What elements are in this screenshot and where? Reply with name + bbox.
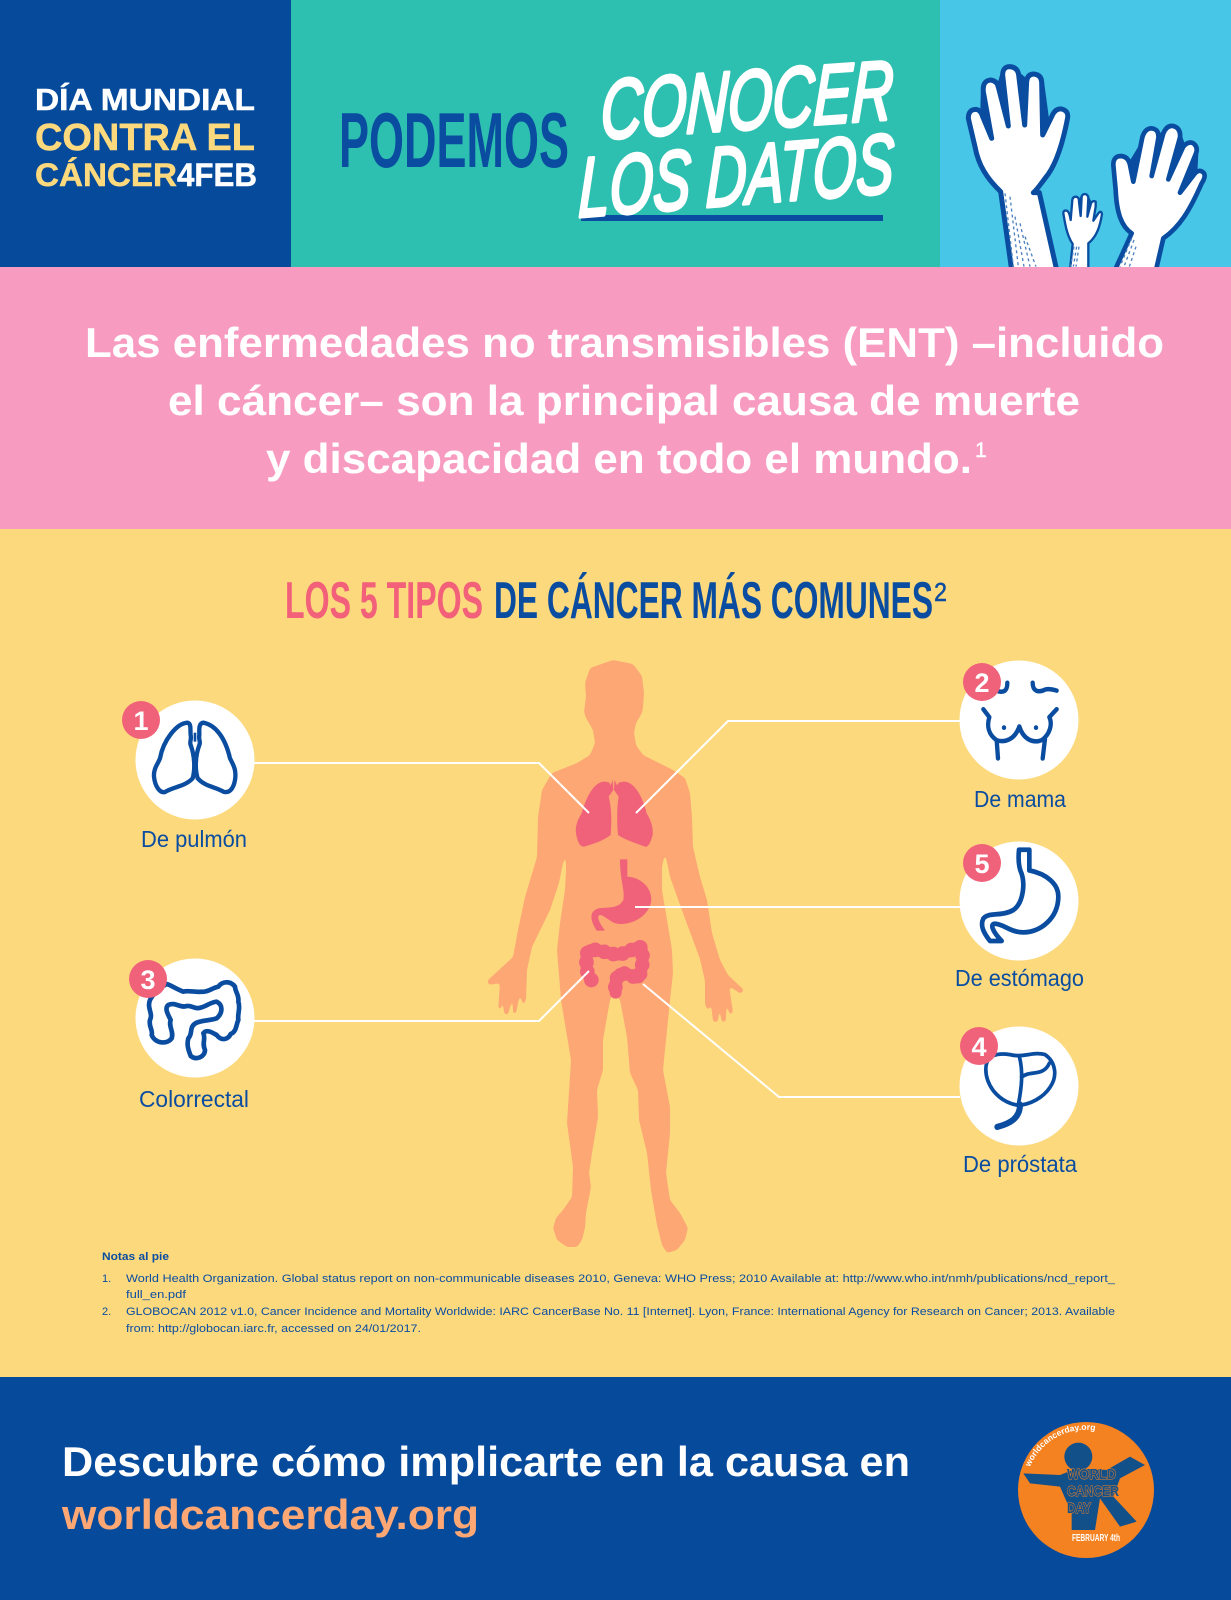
callout: prostate cancer <box>960 1026 1078 1177</box>
panel: campaign name <box>0 0 291 267</box>
panel: call to action: worldcancerday.org <box>61 1491 479 1538</box>
footnotes: Notas al pie <box>102 1251 169 1263</box>
callout: lung cancer <box>122 700 254 852</box>
icon: colon <box>149 982 239 1058</box>
footnotes: from: http://globocan.iarc.fr, accessed on 24/01/2017. <box>126 1323 421 1335</box>
footnotes: full_en.pdf <box>126 1289 187 1301</box>
World Cancer Day logo: DAY <box>1067 1500 1091 1517</box>
panel: key message: 1 <box>975 439 987 462</box>
number badge 4: 4 <box>971 1032 987 1062</box>
icon: stomach <box>982 850 1058 941</box>
organ: lungs <box>576 780 653 847</box>
callout: colorectal cancer: Colorrectal <box>139 1086 249 1112</box>
panel: slogan: PODEMOS <box>339 96 569 184</box>
number badge 1 <box>122 701 160 739</box>
number badge 4 <box>960 1027 998 1065</box>
icon: lungs <box>154 723 235 792</box>
arm hatching <box>1005 193 1136 267</box>
panel: slogan: LOS DATOS <box>578 116 895 235</box>
icon: prostate <box>986 1054 1055 1127</box>
panel: slogan: CONOCER <box>599 43 895 157</box>
footnotes: 1. <box>102 1273 111 1285</box>
callout: prostate cancer: De próstata <box>963 1151 1077 1177</box>
panel: campaign name: 4FEB <box>177 157 257 193</box>
footnotes <box>102 1251 1116 1335</box>
number badge 5: 5 <box>974 849 990 879</box>
heading: five most common cancers <box>285 572 947 630</box>
panel: key message: y discapacidad en todo el mundo. <box>266 435 972 482</box>
icon: small hand <box>1063 194 1102 270</box>
number badge 5 <box>963 844 1001 882</box>
footnotes: World Health Organization. Global status report on non-communicable diseases 2010, Geneva: WHO Press; 2010 Available at: http://www.who.int/nmh/publications/ncd_report_ <box>126 1273 1116 1285</box>
callout: colorectal cancer <box>129 958 254 1112</box>
callout: stomach cancer <box>955 842 1084 991</box>
panel: key message: Las enfermedades no transmisibles (ENT) –incluido <box>85 319 1164 366</box>
panel: campaign name: DÍA MUNDIAL <box>35 82 255 117</box>
icon: breast <box>983 683 1057 758</box>
number badge 2 <box>963 663 1001 701</box>
header band <box>0 0 1231 270</box>
callout: lung cancer: De pulmón <box>141 826 247 852</box>
World Cancer Day logo: worldcancerday.org <box>1026 1425 1096 1466</box>
heading: five most common cancers: 2 <box>934 577 947 607</box>
callout lines <box>254 721 960 1097</box>
icon: right hand <box>1113 126 1205 270</box>
callout: stomach cancer: De estómago <box>955 965 1084 991</box>
panel: call to action: Descubre cómo implicarte en la causa en <box>62 1438 910 1485</box>
panel: common cancers <box>0 529 1231 1377</box>
World Cancer Day logo: CANCER <box>1067 1483 1119 1500</box>
World Cancer Day logo: FEBRUARY 4th <box>1072 1533 1120 1544</box>
panel: raised hands <box>940 0 1231 270</box>
organ: stomach <box>591 859 651 931</box>
number badge 2: 2 <box>974 668 990 698</box>
body silhouette with organs <box>487 660 744 1253</box>
footnotes: 2. <box>102 1306 111 1318</box>
callout: breast cancer: De mama <box>974 786 1066 812</box>
panel: key message <box>0 267 1231 529</box>
number badge 3 <box>129 960 167 998</box>
heading: five most common cancers: DE CÁNCER MÁS COMUNES <box>494 572 933 630</box>
number badge 3: 3 <box>140 965 156 995</box>
panel: slogan <box>291 0 940 267</box>
World Cancer Day logo <box>1018 1422 1154 1558</box>
organ: colon <box>586 947 643 993</box>
number badge 1: 1 <box>133 706 149 736</box>
icon: large hand <box>968 67 1068 270</box>
World Cancer Day logo: WORLD <box>1067 1466 1116 1483</box>
panel: campaign name: CONTRA EL <box>35 117 255 159</box>
heading: five most common cancers: LOS 5 TIPOS <box>285 572 483 630</box>
panel: key message: el cáncer– son la principal causa de muerte <box>168 377 1080 424</box>
panel: call to action <box>0 1377 1231 1600</box>
callout: breast cancer <box>960 660 1078 812</box>
footnotes: GLOBOCAN 2012 v1.0, Cancer Incidence and Mortality Worldwide: IARC CancerBase No. 11 [Internet]. Lyon, France: International Agency for Research on Cancer; 2013. Available <box>126 1306 1115 1318</box>
panel: campaign name: CÁNCER <box>35 157 177 193</box>
